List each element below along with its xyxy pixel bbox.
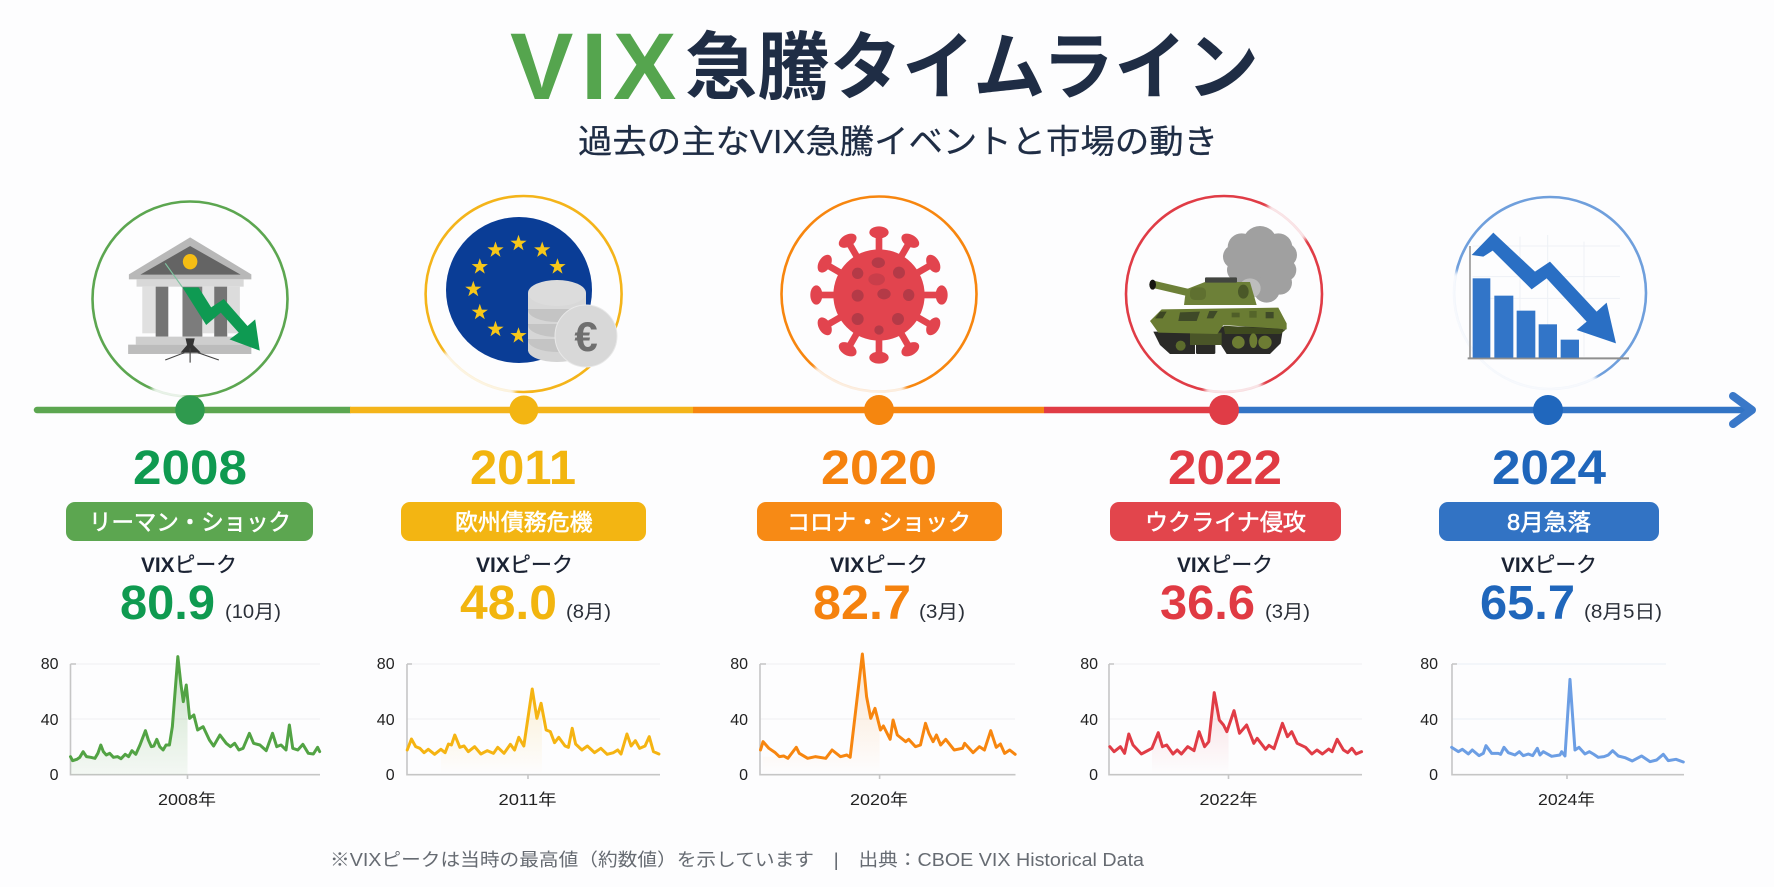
subtitle: 過去の主なVIX急騰イベントと市場の動き <box>578 123 1218 160</box>
peak value <box>1160 577 1310 630</box>
panel: 2020 <box>730 196 1016 809</box>
event pill <box>1439 502 1659 541</box>
event pill: リーマン・ショック <box>89 509 291 535</box>
line chart 2011 <box>377 656 660 809</box>
line chart 2024: 2024年 <box>1538 791 1595 809</box>
icon: tank with smoke <box>1126 196 1322 392</box>
icon: EU flag with euro coins <box>426 196 622 392</box>
line chart 2020: 2020年 <box>850 791 908 809</box>
icon: EU flag with euro coins: € <box>574 313 598 360</box>
peak label: VIXピーク <box>830 554 928 577</box>
peak value: (3月) <box>919 602 965 623</box>
panel: 2022 <box>1080 196 1362 809</box>
peak value: (10月) <box>225 602 281 623</box>
line chart 2008: 40 <box>41 712 59 729</box>
peak label: VIXピーク <box>476 554 573 577</box>
event pill <box>1110 502 1341 541</box>
peak value: (8月5日) <box>1584 602 1662 623</box>
title <box>510 14 1259 120</box>
peak value <box>460 577 611 630</box>
year 2024: 2024 <box>1492 442 1606 495</box>
event pill: ウクライナ侵攻 <box>1145 509 1306 535</box>
year 2011: 2011 <box>470 442 576 495</box>
panel: 2008 <box>41 202 320 809</box>
peak value: 48.0 <box>460 577 557 630</box>
event pill: 8月急落 <box>1507 509 1591 535</box>
event pill <box>401 502 646 541</box>
timeline dot 2020 <box>864 395 894 425</box>
icon: virus <box>782 196 976 392</box>
line chart 2008: 2008年 <box>158 791 216 809</box>
line chart 2020: 0 <box>739 767 748 784</box>
title: VIX <box>510 14 676 120</box>
line chart 2011: 40 <box>377 712 395 729</box>
peak value: 82.7 <box>813 577 911 630</box>
line chart 2024: 0 <box>1429 767 1438 784</box>
peak value <box>813 577 965 630</box>
footer note: ※VIXピークは当時の最高値（約数値）を示しています | 出典：CBOE VIX Historical Data <box>330 850 1145 870</box>
line chart 2022: 2022年 <box>1200 791 1258 809</box>
peak value: (8月) <box>566 602 611 623</box>
timeline dot 2011 <box>509 396 538 424</box>
line chart 2011: 80 <box>377 656 395 673</box>
timeline dot 2024 <box>1533 395 1563 425</box>
line chart 2020 <box>730 654 1016 809</box>
line chart 2008 <box>41 656 320 809</box>
line chart 2020: 80 <box>730 656 748 673</box>
peak value <box>1480 577 1662 630</box>
line chart 2024: 40 <box>1420 712 1438 729</box>
timeline dot 2008 <box>175 395 205 425</box>
event pill: 欧州債務危機 <box>455 509 592 535</box>
line chart 2020: 40 <box>730 712 748 729</box>
timeline axis with arrow <box>37 396 1752 424</box>
icon: bank with falling arrow <box>92 202 288 396</box>
line chart 2008: 0 <box>50 767 59 784</box>
peak value <box>120 577 281 630</box>
event pill <box>66 502 313 541</box>
line chart 2022 <box>1080 656 1362 809</box>
panel: 2024 <box>1420 197 1684 809</box>
year 2008: 2008 <box>133 442 247 495</box>
year 2022: 2022 <box>1168 442 1282 495</box>
line chart 2024: 80 <box>1420 656 1438 673</box>
event pill: コロナ・ショック <box>787 509 971 535</box>
peak label: VIXピーク <box>1501 554 1597 577</box>
peak label: VIXピーク <box>141 554 237 577</box>
peak value: 65.7 <box>1480 577 1575 630</box>
line chart 2022: 0 <box>1089 767 1098 784</box>
timeline dot 2022 <box>1209 395 1239 425</box>
line chart 2024 <box>1420 656 1684 809</box>
peak value: (3月) <box>1265 602 1310 623</box>
line chart 2011: 2011年 <box>498 791 556 809</box>
line chart 2008: 80 <box>41 656 59 673</box>
peak value: 80.9 <box>120 577 215 630</box>
panel: 2011 <box>377 196 660 809</box>
peak label: VIXピーク <box>1177 554 1273 577</box>
line chart 2011: 0 <box>386 767 395 784</box>
peak value: 36.6 <box>1160 577 1255 630</box>
year 2020: 2020 <box>821 442 937 495</box>
title: 急騰タイムライン <box>685 26 1259 109</box>
icon: falling bar chart <box>1454 197 1646 389</box>
event pill <box>757 502 1002 541</box>
line chart 2022: 80 <box>1080 656 1098 673</box>
line chart 2022: 40 <box>1080 712 1098 729</box>
